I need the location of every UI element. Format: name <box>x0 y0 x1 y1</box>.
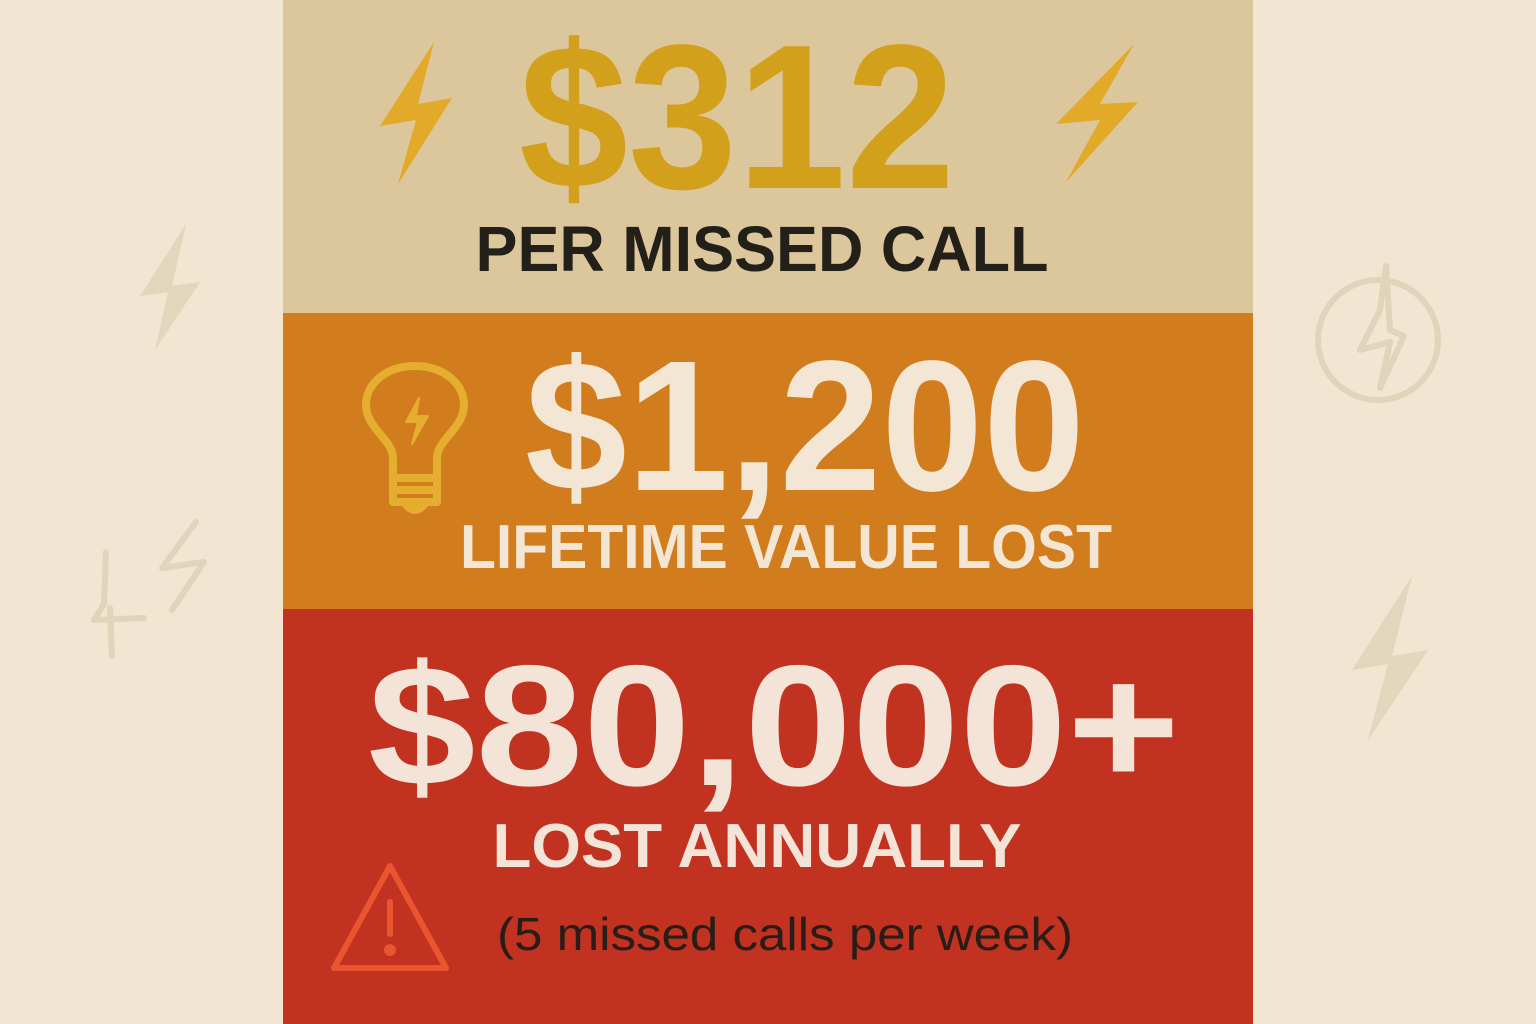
panel: lost annually <box>283 609 1253 1024</box>
note: 5 missed calls per week: (5 missed calls per week) <box>497 908 1073 960</box>
icon: warning triangle <box>334 866 446 968</box>
icon: bolt left <box>380 42 452 184</box>
stat: $312: $312 <box>519 2 955 232</box>
panel: per missed call <box>283 0 1253 313</box>
label: lifetime value lost: LIFETIME VALUE LOST <box>460 513 1112 582</box>
icon: lightbulb <box>366 366 464 510</box>
background decorative bolt left top <box>140 224 200 350</box>
panel: lifetime value <box>283 313 1253 609</box>
label: per missed call: PER MISSED CALL <box>476 213 1048 285</box>
icon: bolt right <box>1056 44 1138 182</box>
background decorative bolt right bottom <box>1352 576 1428 740</box>
background icon: circled bolt right <box>1318 266 1438 400</box>
stat: $80,000+: $80,000+ <box>368 630 1180 822</box>
label: lost annually: LOST ANNUALLY <box>492 812 1022 881</box>
background decorative bolts left bottom <box>94 522 204 656</box>
stat: $1,200: $1,200 <box>525 323 1085 530</box>
